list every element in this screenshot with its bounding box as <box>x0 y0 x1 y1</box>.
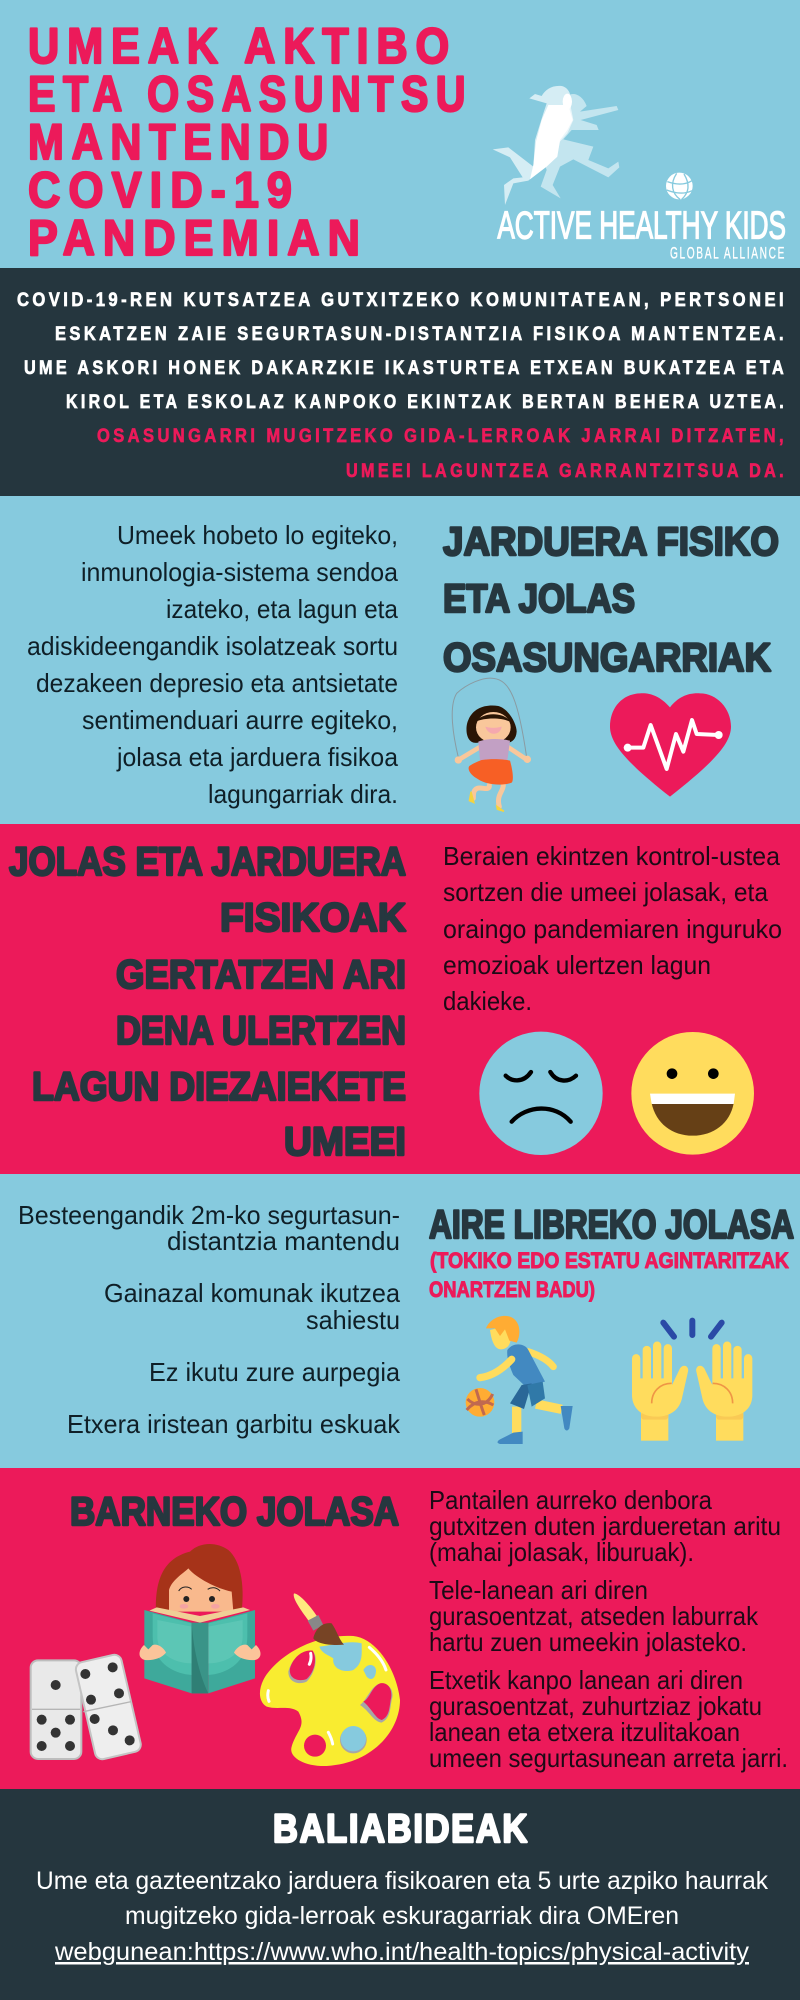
text block: benefits: adiskideengandik isolatzeak sortu <box>27 631 398 661</box>
text block: emotions: sortzen die umeei jolasak, eta <box>443 877 769 907</box>
text block: indoor advice: Tele-lanean ari diren <box>429 1575 648 1605</box>
heading: BALIABIDEAK <box>273 1807 529 1851</box>
title: UMEAK AKTIBO <box>28 18 457 74</box>
text block: indoor advice: Etxetik kanpo lanean ari diren <box>429 1665 743 1695</box>
panel: healthy activity <box>0 496 800 824</box>
left hand <box>632 1341 688 1441</box>
subheading: ONARTZEN BADU) <box>429 1277 595 1302</box>
text block: indoor advice: (mahai jolasak, liburuak). <box>429 1537 694 1567</box>
icon: girl skipping rope <box>452 678 531 811</box>
text block: outdoor rules: sahiestu <box>306 1305 400 1335</box>
panel: header <box>0 0 800 268</box>
heading <box>443 520 779 680</box>
icon: child reading book <box>139 1544 260 1693</box>
title: ETA OSASUNTSU <box>28 66 473 122</box>
text block: benefits: sentimenduari aurre egiteko, <box>82 705 398 735</box>
text block: outdoor rules: Gainazal komunak ikutzea <box>104 1278 401 1308</box>
heading: UMEEI <box>284 1120 406 1164</box>
heading: FISIKOAK <box>220 896 406 940</box>
panel: understanding <box>0 824 800 1174</box>
heading <box>9 840 406 1164</box>
heading: OSASUNGARRIAK <box>443 636 771 680</box>
text block: resources: webgunean:https://www.who.int/health-topics/physical-activity <box>54 1938 749 1966</box>
intro text <box>17 289 787 413</box>
text block: emotions: oraingo pandemiaren inguruko <box>443 914 782 944</box>
heading: ETA JOLAS <box>443 577 635 621</box>
title <box>28 18 473 266</box>
text block: resources: Ume eta gazteentzako jarduera fisikoaren eta 5 urte azpiko haurrak <box>36 1867 768 1895</box>
text block: indoor advice: lanean eta etxera itzulitakoan <box>429 1717 740 1747</box>
text block: emotions <box>443 841 782 1016</box>
icon: heart with pulse <box>610 693 731 797</box>
text block: emotions: dakieke. <box>443 986 532 1016</box>
text block: outdoor rules <box>18 1200 401 1439</box>
text block: indoor advice: gutxitzen duten jardueretan aritu <box>429 1511 781 1541</box>
icon: jumping children silhouettes <box>493 86 619 205</box>
text block: benefits: dezakeen depresio eta antsietate <box>36 668 398 698</box>
heading: JOLAS ETA JARDUERA <box>9 840 406 884</box>
title: COVID-19 <box>28 162 300 218</box>
icon: sad face <box>479 1032 603 1155</box>
text block: emotions: Beraien ekintzen kontrol-ustea <box>443 841 781 871</box>
text block: benefits <box>27 520 399 809</box>
heading: GERTATZEN ARI <box>116 953 406 997</box>
text block: indoor advice: gurasoentzat, zuhurtziaz jokatu <box>429 1691 762 1721</box>
icon: child dribbling basketball <box>466 1316 573 1444</box>
heading: DENA ULERTZEN <box>116 1009 406 1053</box>
text block: outdoor rules: Etxera iristean garbitu eskuak <box>67 1409 401 1439</box>
text block: indoor advice: hartu zuen umeekin jolasteko. <box>429 1627 747 1657</box>
heading: JARDUERA FISIKO <box>443 520 779 564</box>
text block: benefits: lagungarriak dira. <box>208 779 398 809</box>
panel: indoor play <box>0 1468 800 1789</box>
title: PANDEMIAN <box>28 210 368 266</box>
text block: benefits: izateko, eta lagun eta <box>166 594 398 624</box>
text block: resources: mugitzeko gida-lerroak eskuragarriak dira OMEren <box>125 1902 679 1930</box>
icon: happy face <box>631 1032 754 1155</box>
icon: globe <box>666 173 693 199</box>
text block: outdoor rules: Besteengandik 2m-ko segurtasun- <box>18 1200 400 1230</box>
icon: raised hands <box>632 1321 752 1441</box>
text block: benefits: jolasa eta jarduera fisikoa <box>116 742 399 772</box>
heading: BARNEKO JOLASA <box>70 1490 399 1534</box>
text block: outdoor rules: distantzia mantendu <box>167 1226 400 1256</box>
text block: benefits: inmunologia-sistema sendoa <box>81 557 399 587</box>
text block: emotions: emozioak ulertzen lagun <box>443 950 711 980</box>
text block: indoor advice <box>429 1485 788 1773</box>
subheading <box>429 1248 789 1302</box>
text block: benefits: Umeek hobeto lo egiteko, <box>117 520 398 550</box>
text block: outdoor rules: Ez ikutu zure aurpegia <box>149 1357 401 1387</box>
panel: resources <box>0 1789 800 2000</box>
panel: introduction <box>0 268 800 496</box>
intro highlight <box>97 425 787 482</box>
title: MANTENDU <box>28 114 336 170</box>
logo: Active Healthy Kids Global Alliance <box>493 86 786 262</box>
text block: indoor advice: Pantailen aurreko denbora <box>429 1485 712 1515</box>
text block: resources <box>36 1867 768 1966</box>
text block: indoor advice: gurasoentzat, atseden laburrak <box>429 1601 759 1631</box>
icon: dominoes <box>31 1653 142 1761</box>
icon: paint palette and brush <box>260 1593 400 1766</box>
heading: LAGUN DIEZAIEKETE <box>32 1065 406 1109</box>
right hand <box>696 1341 752 1441</box>
panel: outdoor play <box>0 1174 800 1468</box>
